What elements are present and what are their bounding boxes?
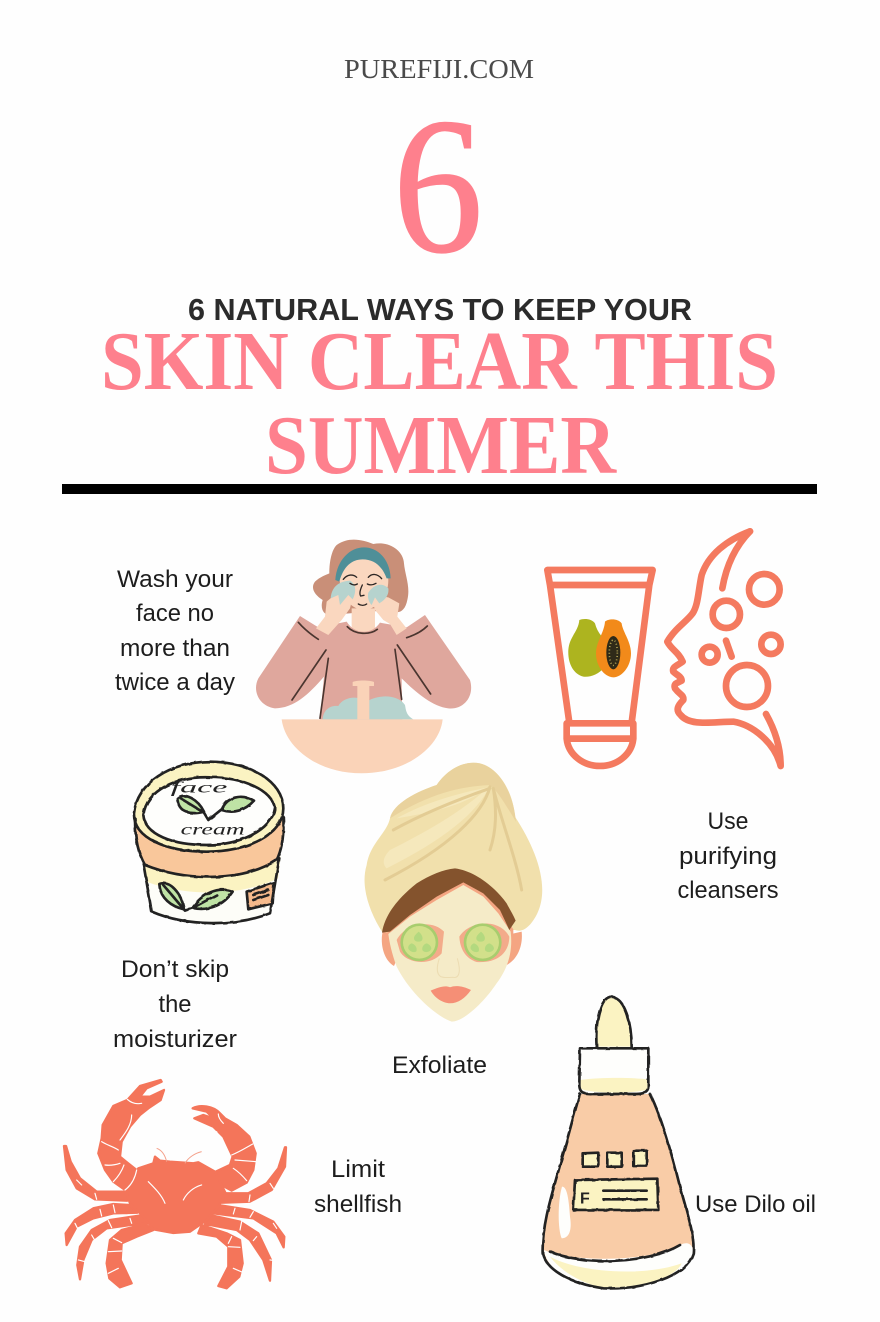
icon: cleanser tube with papaya — [547, 531, 781, 766]
text: wash your face — [115, 566, 235, 696]
brand: PUREFIJI.COM: PUREFIJI.COM — [344, 54, 534, 84]
sweater folds — [292, 622, 431, 718]
neck — [352, 608, 375, 633]
tube outline — [547, 570, 653, 766]
text: use purifying cleansers — [678, 808, 778, 904]
crab body — [126, 1157, 226, 1233]
text: don't skip the moisturizer — [113, 956, 237, 1053]
text: exfoliate: Exfoliate — [392, 1052, 487, 1079]
text: don't skip the moisturizer: Don’t skip — [121, 956, 229, 983]
hands — [316, 592, 407, 635]
sweater — [256, 615, 471, 719]
icon: woman washing face — [256, 540, 471, 773]
text: wash your face: Wash your — [117, 566, 233, 593]
text: use purifying cleansers: Use — [708, 808, 748, 835]
bottle fills — [596, 997, 632, 1047]
crab legs — [64, 1146, 286, 1288]
text: use dilo oil: Use Dilo oil — [695, 1191, 816, 1218]
text: don't skip the moisturizer: moisturizer — [113, 1026, 237, 1053]
basin — [282, 719, 443, 773]
hair — [313, 540, 408, 615]
text: limit shellfish: Limit — [331, 1156, 385, 1183]
text: wash your face: face no — [136, 600, 214, 627]
nose — [437, 958, 459, 978]
heading: 6 natural ways: 6 NATURAL WAYS TO KEEP YOUR — [188, 292, 692, 327]
text: wash your face: twice a day — [115, 669, 235, 696]
face — [388, 885, 511, 1022]
hairline shadow — [386, 881, 513, 940]
ears — [382, 932, 522, 966]
big number 6: 6 — [393, 78, 483, 293]
text: wash your face: more than — [120, 635, 230, 662]
icon: face cream jar: cream — [181, 822, 245, 839]
text: don't skip the moisturizer: the — [158, 991, 192, 1018]
crab claws — [98, 1080, 164, 1190]
text: limit shellfish: shellfish — [314, 1191, 402, 1218]
text: use purifying cleansers: purifying — [679, 843, 777, 870]
towel shading — [390, 763, 516, 822]
text: limit shellfish — [314, 1156, 402, 1218]
cucumber slices — [400, 923, 438, 961]
icon: face cream jar — [134, 762, 284, 923]
icon: crab — [64, 1080, 286, 1288]
divider rule — [62, 484, 817, 494]
title line: summer: SUMMER — [265, 399, 617, 492]
face profile with pores — [667, 531, 781, 766]
headband — [335, 547, 391, 582]
foam in basin — [323, 696, 413, 719]
closed eyes and nose — [343, 574, 382, 605]
icon: woman with towel and cucumber eyes — [365, 763, 542, 1022]
faucet — [353, 680, 374, 719]
crab shell marks — [75, 1099, 277, 1273]
bottle label letter: F — [580, 1190, 590, 1207]
handwritten label: face cream: face — [171, 780, 228, 797]
text: use purifying cleansers: cleansers — [678, 877, 778, 904]
bottle sketch lines — [543, 997, 694, 1288]
eye shadow — [397, 924, 509, 962]
papaya — [568, 619, 631, 677]
icon: Dilo oil bottle — [543, 997, 694, 1288]
foam on cheeks — [331, 581, 388, 605]
towel — [365, 763, 542, 933]
title line: skin clear this: SKIN CLEAR THIS — [101, 315, 778, 408]
hair — [382, 868, 516, 933]
jar sketch lines — [134, 762, 284, 923]
towel folds — [385, 787, 522, 890]
lips — [431, 986, 471, 1003]
jar fills — [143, 857, 280, 923]
face — [339, 553, 388, 610]
